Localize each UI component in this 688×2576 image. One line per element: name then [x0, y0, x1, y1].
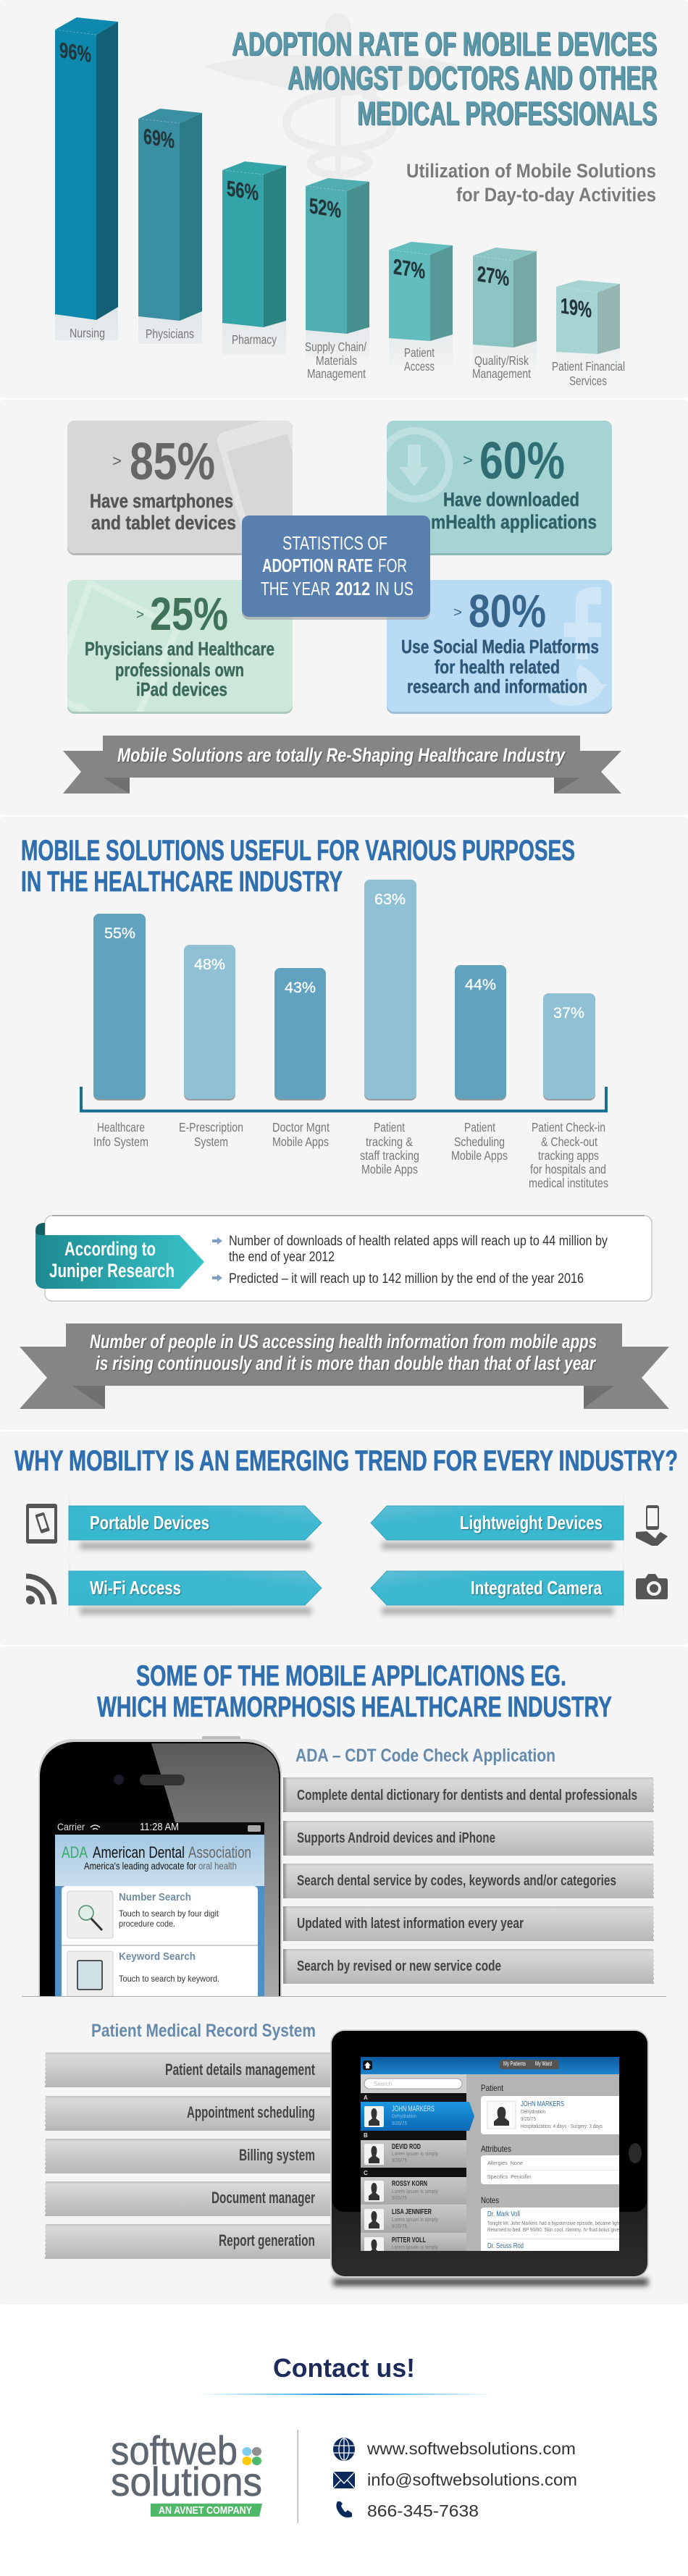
bar: check-in 37%: [543, 993, 595, 1100]
tablet screen: Dr. Mark Voll: [487, 2210, 520, 2218]
bar: patient access 27%: 27%: [393, 255, 425, 284]
tablet screen: 9/20/75: [392, 2224, 407, 2229]
bar labels: [70, 326, 625, 388]
tablet screen: 9/20/75: [521, 2117, 536, 2122]
bar labels: purposes: Patient: [464, 1120, 495, 1135]
device: phone ADA app: [38, 1736, 282, 2009]
tablet screen: Lorem Ipsum is simply: [392, 2245, 438, 2250]
feature list: patient record: Patient details management: [165, 2061, 315, 2079]
tablet screen: Lorem Ipsum is simply: [392, 2218, 438, 2223]
bar: doctor mgnt 43%: 43%: [285, 980, 316, 996]
feature list: ADA: Supports Android devices and iPhone: [297, 1830, 495, 1846]
phone screen: oral health: [198, 1860, 237, 1872]
center card: statistics of adoption rate: STATISTICS OF: [282, 532, 387, 554]
bar labels: purposes: Mobile Apps: [451, 1148, 508, 1163]
tablet screen: Dr. Seuss Rod: [487, 2242, 524, 2250]
tablet screen: PITTER VOLL: [392, 2236, 426, 2244]
tablet screen: LISA JENNIFER: [392, 2208, 432, 2216]
heading: contact us: Contact us!: [273, 2353, 415, 2383]
panel: why mobility: [0, 1431, 688, 1645]
card: smartphones 85%: 85%: [130, 433, 215, 491]
ribbon: re-shaping healthcare: [63, 736, 621, 794]
bar: quality risk 27%: 27%: [477, 262, 509, 291]
icon: camera: [636, 1574, 668, 1599]
panel: mobile applications: [0, 1646, 688, 2304]
tablet screen: Returned to bed. BP 90/60. Skin cool, clammy. IV fluid bolus give: [487, 2228, 619, 2233]
contact: email: info@softwebsolutions.com: [367, 2470, 577, 2489]
bar labels: purposes: Mobile Apps: [361, 1162, 418, 1177]
tablet screen: Dehydration: [392, 2114, 416, 2119]
bar chart: purposes: [81, 880, 606, 1111]
tablet screen: My Patients: [503, 2061, 526, 2067]
phone screen: America's leading advocate for: [84, 1860, 196, 1872]
bar: patient financial 19%: 19%: [561, 294, 592, 323]
bullet: downloads: [212, 1234, 608, 1265]
bar labels: purposes: medical institutes: [529, 1176, 608, 1190]
contact: website: [333, 2438, 576, 2461]
phone screen: [55, 1835, 264, 2009]
feature list: patient record: Appointment scheduling: [187, 2103, 315, 2121]
button: integrated camera: Integrated Camera: [471, 1577, 602, 1599]
tablet screen: 9/20/75: [392, 2196, 407, 2201]
card: iPad 25%: 25%: [150, 588, 228, 640]
button: lightweight devices: Lightweight Devices: [460, 1512, 603, 1533]
card: downloaded 60%: >: [463, 451, 473, 469]
bar: physicians 69%: [138, 109, 202, 321]
bar: patient scheduling 44%: 44%: [465, 977, 496, 993]
bar labels: Access: [404, 359, 435, 374]
feature list: patient record: Document manager: [211, 2189, 315, 2207]
bar chart: utilization 3D bars: [55, 17, 620, 380]
center card: statistics of adoption rate: 2012: [335, 578, 370, 599]
bar labels: Physicians: [146, 327, 194, 341]
bar labels: Pharmacy: [232, 332, 277, 347]
card: iPad 25%: >: [136, 607, 144, 623]
icon: phone in hand: [636, 1505, 668, 1546]
callout: juniper research: [35, 1216, 652, 1301]
card: social media 80%: 80%: [469, 585, 546, 637]
phone screen: procedure code.: [119, 1919, 175, 1929]
feature list: patient record: [45, 2053, 330, 2259]
bar: e-prescription 48%: 48%: [194, 956, 225, 973]
button: portable devices: Portable Devices: [90, 1512, 209, 1533]
card: iPad 25%: Physicians and Healthcare: [85, 638, 274, 660]
bar labels: purposes: & Check-out: [541, 1135, 597, 1149]
panel: statistics: [0, 400, 688, 815]
title: mobile solutions useful: [21, 835, 575, 898]
phone screen: Association: [188, 1843, 251, 1861]
button: lightweight devices: [371, 1491, 624, 1554]
phone screen: American Dental: [93, 1843, 185, 1861]
subtitle: utilization: Utilization of Mobile Solutions: [406, 160, 656, 182]
bar labels: purposes: Patient Check-in: [532, 1120, 605, 1135]
bar labels: purposes: Mobile Apps: [272, 1135, 329, 1149]
bar: quality risk 27%: [473, 248, 537, 348]
tablet screen: JOHN MARKERS: [521, 2100, 564, 2108]
button: wi-fi access: [69, 1557, 322, 1620]
tablet screen: Tonight Mr. John Markers had a hypotensive episode, became ligh: [487, 2221, 619, 2226]
bar labels: purposes: Doctor Mgnt: [272, 1120, 330, 1135]
bar: patient financial 19%: [556, 280, 620, 354]
tablet screen: Allergies None: [487, 2161, 523, 2166]
center card: statistics of adoption rate: IN US: [375, 578, 414, 599]
ribbon: people accessing health information: [20, 1323, 669, 1409]
bar labels: Supply Chain/: [305, 340, 366, 354]
bar labels: Patient Financial: [552, 359, 625, 374]
phone screen: Number Search: [119, 1891, 191, 1903]
bar labels: Management: [472, 366, 531, 381]
card: smartphones 85%: >: [112, 452, 122, 470]
bar labels: Patient: [404, 345, 435, 360]
feature list: ADA: Search by revised or new service code: [297, 1958, 501, 1974]
tablet screen: Attributes: [481, 2144, 511, 2154]
card: smartphones 85%: and tablet devices: [91, 512, 236, 534]
tablet screen: Search: [374, 2081, 392, 2087]
bullet: downloads: the end of year 2012: [229, 1250, 335, 1265]
tablet screen: Lorem Ipsum is simply: [392, 2152, 438, 2157]
phone screen: Touch to search by four digit: [119, 1908, 219, 1919]
feature list: ADA: [283, 1777, 654, 1984]
panel: adoption rate: [0, 0, 688, 398]
tag: according to juniper research: According to: [64, 1238, 156, 1260]
icon: wifi: [26, 1576, 54, 1604]
contact: website: www.softwebsolutions.com: [366, 2439, 576, 2458]
tablet screen: My Ward: [535, 2061, 552, 2067]
bar: patient tracking 63%: [364, 880, 416, 1100]
section: contact: [111, 2353, 577, 2523]
button: integrated camera: [371, 1557, 624, 1620]
icon: facebook and twitter watermark: [548, 587, 608, 706]
bar labels: purposes: tracking apps: [538, 1148, 599, 1163]
feature list: patient record: Report generation: [219, 2231, 315, 2249]
bar: pharmacy 56%: [222, 161, 286, 327]
bar labels: purposes: Patient: [374, 1120, 405, 1135]
heading: patient medical record system: Patient Medical Record System: [91, 2021, 316, 2041]
button: portable devices: [69, 1491, 322, 1554]
title: adoption rate: [232, 25, 657, 132]
bar: doctor mgnt 43%: [274, 968, 326, 1100]
tablet screen: Hospitalization: 4 days - Surgery: 3 days: [521, 2124, 603, 2129]
tablet screen: Lorem Ipsum is simply: [392, 2189, 438, 2194]
bar: patient access 27%: [389, 242, 453, 341]
tablet screen: A: [364, 2095, 368, 2101]
tablet screen: Notes: [481, 2195, 499, 2205]
bar: supply chain 52%: [306, 178, 369, 334]
title: some of the mobile applications: [97, 1660, 612, 1723]
phone screen: Touch to search by keyword.: [119, 1974, 219, 1984]
feature list: patient record: Billing system: [239, 2146, 315, 2164]
bar: check-in 37%: 37%: [553, 1005, 584, 1022]
icon: tablet watermark: [67, 580, 180, 712]
bullet: downloads: Number of downloads of health related apps will reach up to 44 million by: [229, 1234, 608, 1249]
logo: softweb solutions: solutions: [111, 2459, 262, 2504]
bar: nursing 96%: 96%: [59, 38, 91, 67]
tablet screen: Patient: [481, 2083, 504, 2093]
bar: nursing 96%: [55, 17, 118, 320]
center card: statistics of adoption rate: FOR: [378, 555, 407, 576]
card: social media 80%: [387, 580, 612, 714]
bar: patient tracking 63%: 63%: [374, 891, 406, 908]
ribbon: re-shaping healthcare: Mobile Solutions are totally Re-Shaping Healthcare Industry: [117, 744, 566, 766]
tablet screen: C: [364, 2170, 368, 2176]
bullet: predicted: Predicted – it will reach up to 142 million by the end of the year 2016: [229, 1271, 584, 1287]
card: social media 80%: for health related: [435, 656, 560, 678]
card: downloaded 60%: 60%: [479, 432, 565, 490]
phone screen: ADA: [62, 1843, 88, 1861]
bar labels: Quality/Risk: [474, 353, 529, 368]
tablet screen: ROSSY KORN: [392, 2180, 427, 2188]
bar labels: Nursing: [70, 326, 105, 340]
bar labels: purposes: Info System: [93, 1135, 148, 1149]
tablet screen: JOHN MARKERS: [392, 2105, 435, 2113]
card: iPad 25%: [67, 580, 293, 714]
bar labels: purposes: Scheduling: [454, 1135, 505, 1149]
contact: phone: 866-345-7638: [367, 2501, 479, 2520]
feature list: ADA: Updated with latest information every year: [297, 1916, 524, 1932]
bar labels: purposes: E-Prescription: [179, 1120, 243, 1135]
device: tablet patient record: [330, 2029, 649, 2286]
card: smartphones 85%: Have smartphones: [90, 490, 233, 512]
card: iPad 25%: iPad devices: [136, 678, 227, 700]
tablet screen: DEVID ROD: [392, 2143, 421, 2151]
bar: physicians 69%: 69%: [143, 125, 175, 153]
icon: tablet: [26, 1504, 57, 1544]
bar labels: Services: [569, 374, 607, 388]
tablet screen: B: [364, 2132, 368, 2139]
bar: healthcare info 55%: [93, 914, 146, 1100]
logo: softweb solutions: AN AVNET COMPANY: [159, 2504, 252, 2517]
logo: softweb solutions: softweb: [111, 2428, 238, 2473]
icon: phone watermark: [217, 421, 293, 527]
tablet screen: 9/20/75: [392, 2121, 407, 2126]
bar labels: Management: [307, 366, 366, 381]
center card: statistics of adoption rate: ADOPTION RATE: [262, 555, 373, 576]
bar: healthcare info 55%: 55%: [104, 925, 135, 942]
card: downloaded 60%: mHealth applications: [431, 511, 597, 533]
icon: caduceus watermark: [202, 13, 463, 177]
tablet screen: Specifics Penicillin: [487, 2175, 531, 2180]
tablet screen: [361, 2057, 626, 2258]
logo: softweb solutions: [111, 2428, 262, 2517]
bar: patient scheduling 44%: [455, 965, 506, 1100]
panel: mobile solutions purposes: [0, 817, 688, 1430]
bar labels: purposes: tracking &: [366, 1135, 413, 1149]
bar labels: purposes: for hospitals and: [530, 1162, 606, 1177]
tag: according to juniper research: Juniper Research: [49, 1260, 175, 1281]
tablet screen: Dehydration: [521, 2110, 545, 2115]
bar labels: purposes: Healthcare: [97, 1120, 145, 1135]
card: downloaded 60%: Have downloaded: [443, 489, 579, 510]
bar labels: purposes: [93, 1120, 608, 1190]
bar labels: purposes: staff tracking: [360, 1148, 419, 1163]
device: phone ADA app: Carrier: [57, 1821, 85, 1832]
bar: e-prescription 48%: [184, 945, 235, 1100]
tablet screen: 9/20/75: [392, 2158, 407, 2163]
card: smartphones 85%: [67, 421, 293, 555]
center card: statistics of adoption rate: [242, 515, 430, 620]
title: mobile solutions useful: IN THE HEALTHCARE INDUSTRY: [21, 866, 343, 898]
subtitle: utilization: for Day-to-day Activities: [456, 184, 656, 206]
card: social media 80%: Use Social Media Platforms: [401, 636, 599, 657]
subtitle: utilization: [406, 160, 656, 206]
tag: according to juniper research: [35, 1223, 204, 1289]
bar: supply chain 52%: 52%: [309, 194, 341, 223]
bar: pharmacy 56%: 56%: [227, 177, 259, 206]
card: iPad 25%: professionals own: [115, 659, 244, 681]
bar labels: Materials: [316, 353, 357, 368]
card: social media 80%: >: [453, 605, 462, 620]
center card: statistics of adoption rate: THE YEAR: [261, 578, 330, 599]
phone screen: Keyword Search: [119, 1950, 196, 1963]
card: downloaded 60%: [381, 421, 612, 555]
heading: ADA CDT code check: ADA – CDT Code Check Application: [295, 1746, 555, 1766]
button: wi-fi access: Wi-Fi Access: [90, 1577, 181, 1599]
device: phone ADA app: 11:28 AM: [140, 1821, 179, 1833]
card: social media 80%: research and information: [407, 675, 587, 697]
icon: download watermark: [381, 431, 449, 499]
bar labels: purposes: System: [194, 1135, 228, 1149]
